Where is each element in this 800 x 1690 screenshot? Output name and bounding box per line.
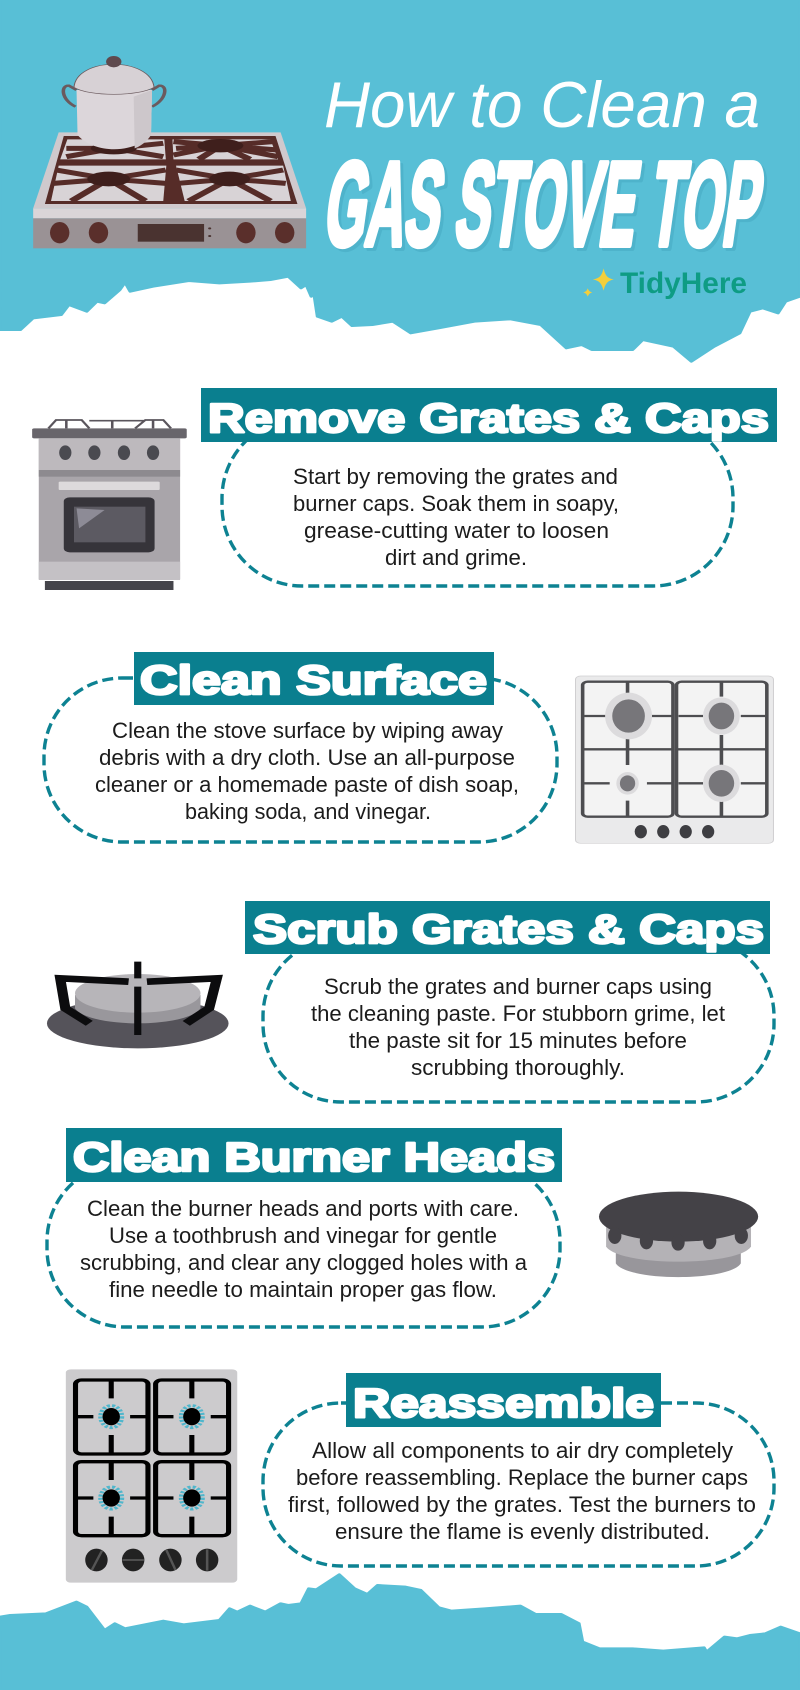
body text: ensure the flame is evenly distributed. (335, 1519, 710, 1544)
body text: cleaner or a homemade paste of dish soap, (95, 772, 519, 797)
body text: burner caps. Soak them in soapy, (293, 491, 619, 516)
title (318, 68, 774, 274)
panel: step 1 remove grates and caps (32, 388, 777, 590)
body text: dirt and grime. (385, 545, 527, 570)
icon: burner with grate (47, 962, 229, 1048)
body text: scrubbing thoroughly. (411, 1055, 625, 1080)
icon: oven range (32, 420, 187, 590)
body text: baking soda, and vinegar. (185, 799, 431, 824)
heading (201, 388, 777, 442)
body text: debris with a dry cloth. Use an all-purpose (99, 745, 515, 770)
icon: white gas cooktop (576, 676, 773, 843)
body text (80, 1196, 528, 1302)
icon: sparkle stars (583, 268, 614, 297)
heading: Clean Burner Heads (73, 1134, 555, 1180)
heading (66, 1128, 562, 1182)
heading: Scrub Grates & Caps (253, 906, 764, 952)
body text: first, followed by the grates. Test the burners to (288, 1492, 756, 1517)
header background with torn edge (0, 0, 800, 362)
body text: scrubbing, and clear any clogged holes with a (80, 1250, 528, 1275)
body text: fine needle to maintain proper gas flow. (109, 1277, 497, 1302)
panel: step 2 clean surface (44, 652, 773, 843)
logo: TidyHere: TidyHere (620, 267, 747, 300)
body text (95, 718, 519, 824)
body text: grease-cutting water to loosen (304, 518, 609, 543)
panel: step 5 reassemble (66, 1369, 774, 1583)
text bubble (222, 418, 733, 586)
heading (346, 1373, 661, 1427)
body text: Clean the stove surface by wiping away (112, 718, 503, 743)
body text (311, 974, 725, 1080)
panel: step 4 clean burner heads (47, 1128, 758, 1327)
heading: Remove Grates & Caps (208, 395, 769, 441)
panel: step 3 scrub grates and caps (47, 901, 774, 1102)
body text (293, 464, 619, 570)
body text: Start by removing the grates and (293, 464, 618, 489)
body text: the cleaning paste. For stubborn grime, let (311, 1001, 725, 1026)
text bubble (263, 1403, 774, 1566)
text bubble (47, 1163, 560, 1327)
heading: Clean Surface (140, 657, 487, 703)
heading (134, 652, 494, 705)
body text: the paste sit for 15 minutes before (349, 1028, 687, 1053)
body text: Allow all components to air dry completely (312, 1438, 733, 1463)
text bubble (44, 678, 557, 842)
heading (245, 901, 770, 954)
body text: Scrub the grates and burner caps using (324, 974, 712, 999)
icon: assembled cooktop (66, 1369, 237, 1583)
icon: burner head (599, 1192, 758, 1277)
text bubble (263, 938, 774, 1102)
body text: before reassembling. Replace the burner caps (296, 1465, 748, 1490)
icon: stove top with pot (33, 56, 306, 248)
body text: Clean the burner heads and ports with care. (87, 1196, 519, 1221)
footer torn edge band (0, 1574, 800, 1690)
body text: Use a toothbrush and vinegar for gentle (109, 1223, 497, 1248)
title line: How to Clean a: How to Clean a (324, 68, 760, 141)
heading: Reassemble (353, 1380, 654, 1426)
body text (288, 1438, 756, 1544)
